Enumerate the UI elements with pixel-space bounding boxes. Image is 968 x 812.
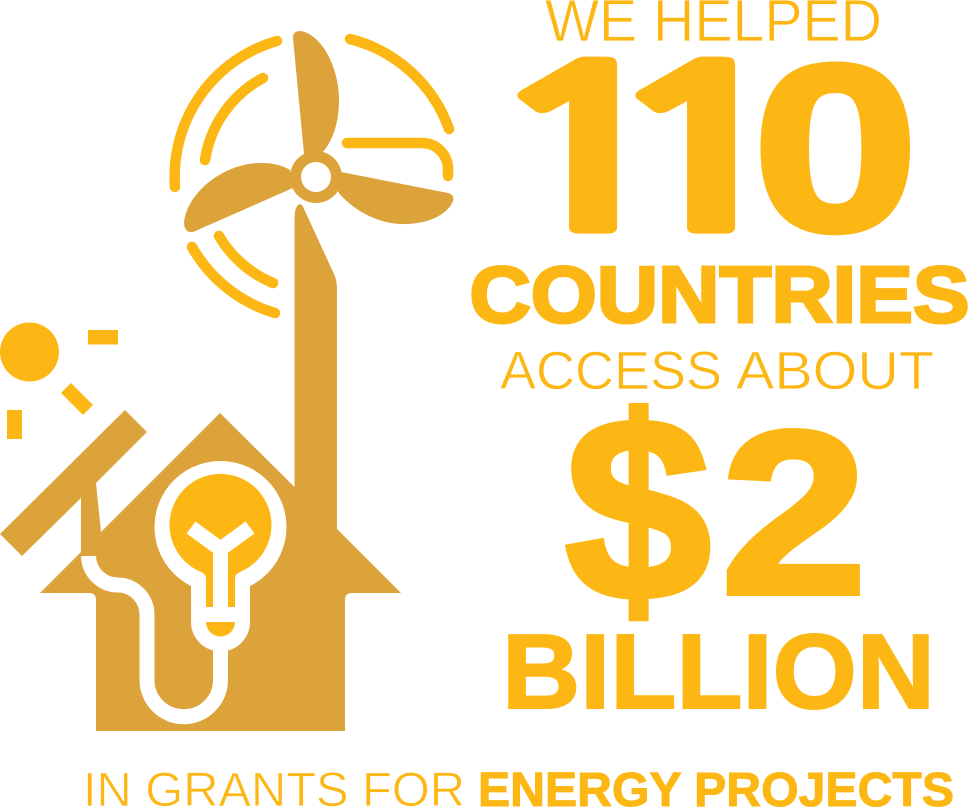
icon: sun (0, 322, 118, 439)
text: in grants for energy projects (83, 764, 954, 812)
icon: wind lines (175, 39, 449, 313)
number: $2: 2 (721, 384, 867, 643)
number: $2: $ (565, 365, 711, 655)
icon: house with turbine tower (40, 204, 401, 731)
icon: turbine blades (184, 31, 453, 232)
number: 110 (476, 16, 918, 281)
text: access about (500, 341, 934, 401)
text: access about: ABOUT (736, 341, 934, 401)
number: 110: 1 (594, 41, 812, 264)
number: $2 (565, 365, 867, 655)
icon: light bulb (155, 461, 287, 651)
heading: countries: COUNTRIES (470, 250, 968, 339)
text: access about: ACCESS (500, 341, 722, 401)
number: 110: 1 (476, 41, 694, 264)
heading: billion: BILLION (502, 613, 935, 731)
number: 110: 0 (752, 16, 918, 281)
illustration: house, wind turbine and solar panel (0, 31, 453, 731)
icon: solar panel (0, 410, 147, 556)
icon: power cord (88, 556, 220, 717)
